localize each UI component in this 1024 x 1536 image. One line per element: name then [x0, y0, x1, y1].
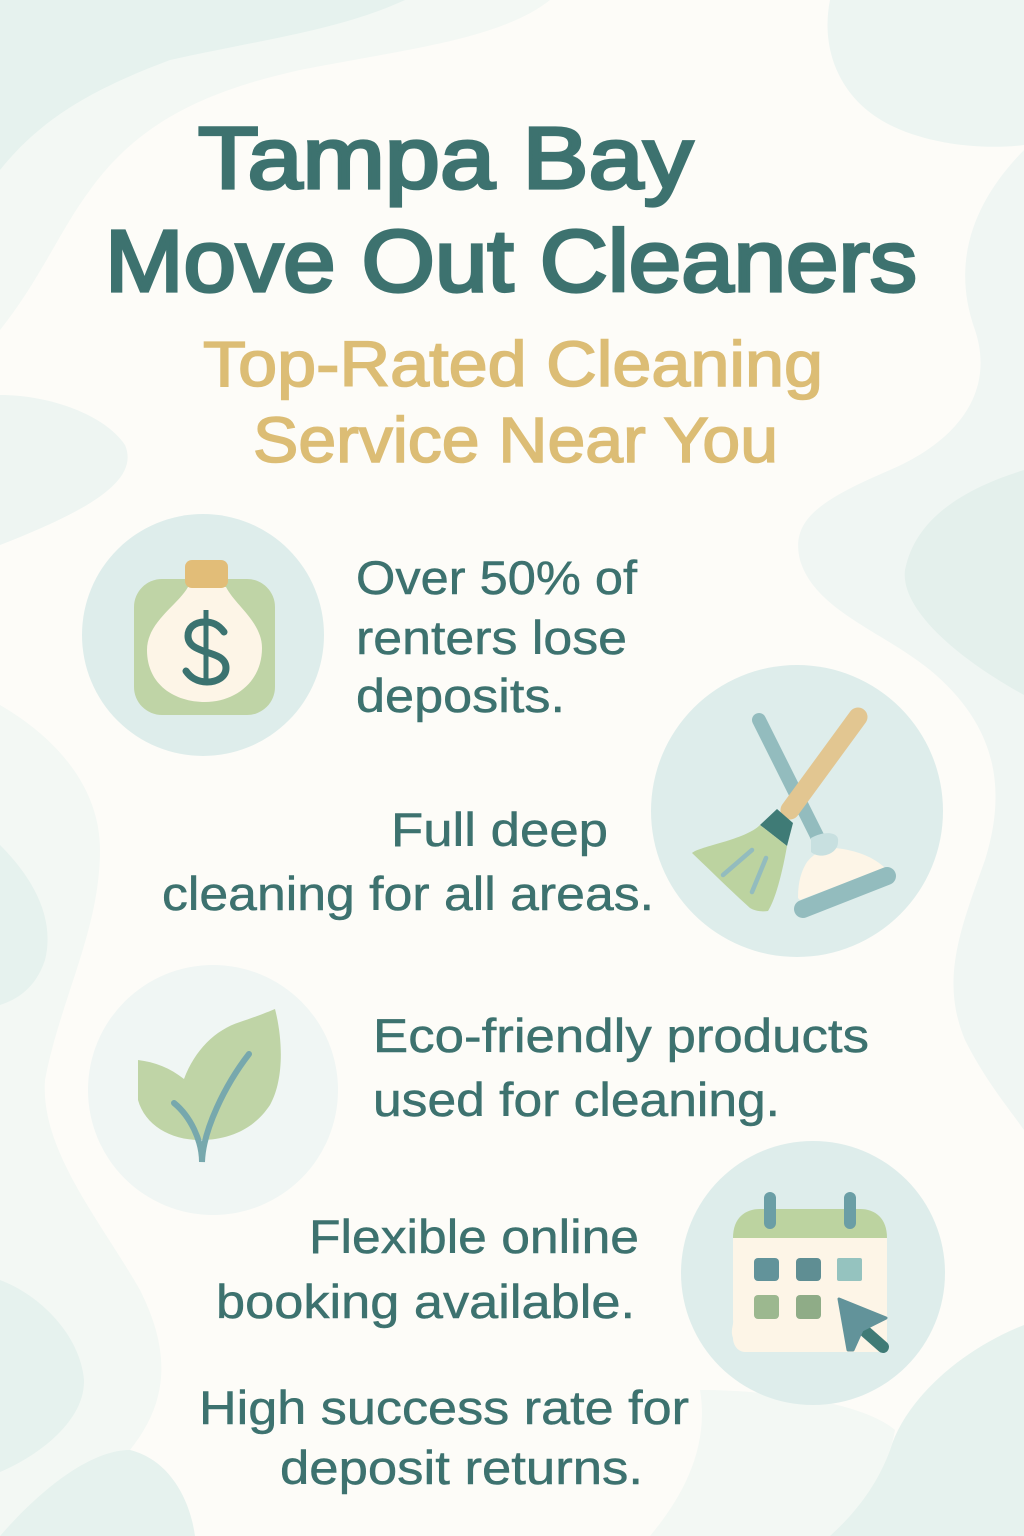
text: deposits: deposits. [356, 669, 565, 722]
subtitle [203, 328, 823, 476]
text: success rate: High success rate for [199, 1381, 689, 1434]
text: success rate: deposit returns. [280, 1441, 643, 1494]
icon: broom and mop [651, 665, 943, 957]
text: deep cleaning: cleaning for all areas. [162, 867, 654, 920]
subtitle: Top-Rated Cleaning [203, 328, 823, 400]
text: deposits: Over 50% of [356, 551, 638, 604]
subtitle: Service Near You [253, 404, 778, 476]
text: eco friendly: Eco-friendly products [373, 1009, 869, 1062]
text: online booking: Flexible online [309, 1210, 639, 1263]
title: Move Out Cleaners [105, 213, 917, 310]
text: online booking [216, 1210, 639, 1328]
icon: leaf [88, 965, 338, 1215]
text: eco friendly: used for cleaning. [373, 1073, 780, 1126]
text: eco friendly [373, 1009, 869, 1126]
text: deep cleaning: Full deep [391, 803, 608, 856]
text: deep cleaning [162, 803, 654, 920]
title [105, 110, 917, 310]
text: success rate [199, 1381, 689, 1494]
text: deposits: renters lose [356, 611, 627, 664]
title: Tampa Bay [198, 110, 694, 207]
icon: calendar with cursor [681, 1141, 945, 1405]
text: online booking: booking available. [216, 1275, 635, 1328]
text: deposits [356, 551, 638, 722]
icon: money bag [82, 514, 324, 756]
